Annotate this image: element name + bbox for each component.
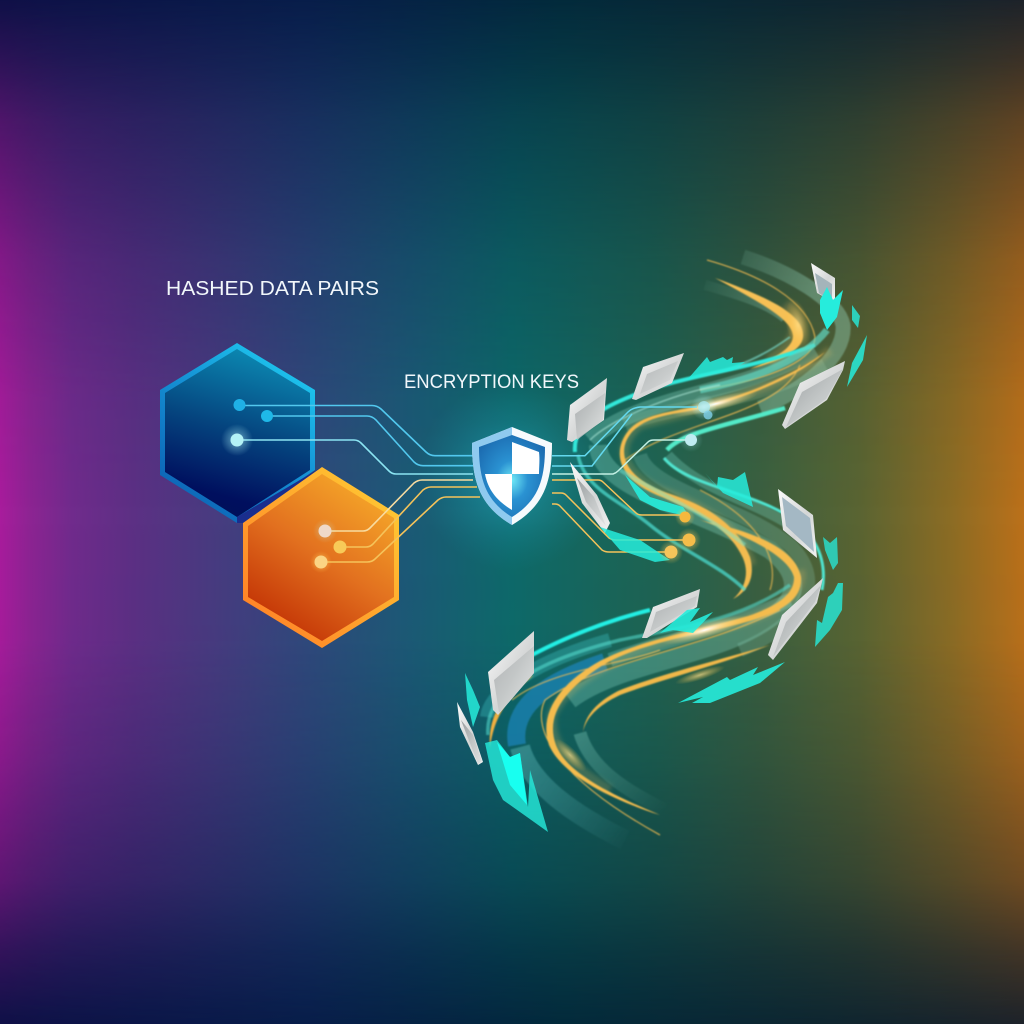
shield glow xyxy=(417,381,607,571)
panel: top xyxy=(811,263,835,303)
connector lines: blue inputs xyxy=(237,406,473,474)
connector lines: gold inputs xyxy=(321,480,480,562)
panel: left upper xyxy=(567,378,607,442)
panel: bottom left small xyxy=(457,702,483,765)
data nodes: orange hexagon xyxy=(310,519,346,573)
panel: large right xyxy=(782,361,845,429)
panel: lower right xyxy=(768,578,823,660)
stream: gold glow xyxy=(552,305,830,790)
hexagon: data pair (orange) xyxy=(237,467,399,648)
cyan fragments xyxy=(465,287,867,832)
data nodes: blue hexagon xyxy=(221,399,273,456)
connector lines: gold outputs xyxy=(552,480,688,552)
icon: shield xyxy=(472,427,552,525)
output nodes xyxy=(659,394,717,564)
heading: encryption keys: ENCRYPTION KEYS xyxy=(404,371,579,393)
connector lines: blue outputs xyxy=(552,407,697,474)
panel: bottom left upper xyxy=(488,631,534,715)
stream: cyan ribbons xyxy=(488,330,827,735)
stream: gold ribbons xyxy=(490,260,825,835)
panel: lower middle xyxy=(642,589,700,638)
panel: centre left xyxy=(570,462,610,533)
swirling encrypted data stream xyxy=(487,257,843,840)
stream: translucent wide bands xyxy=(487,257,843,840)
heading: hashed data pairs: HASHED DATA PAIRS xyxy=(166,278,379,300)
panel: upper middle xyxy=(632,353,684,400)
encrypted panels: floating shards xyxy=(457,263,845,765)
hexagon: hashed data (blue) xyxy=(160,343,315,523)
stream: light flares xyxy=(549,297,815,776)
panel: centre right xyxy=(778,489,817,558)
